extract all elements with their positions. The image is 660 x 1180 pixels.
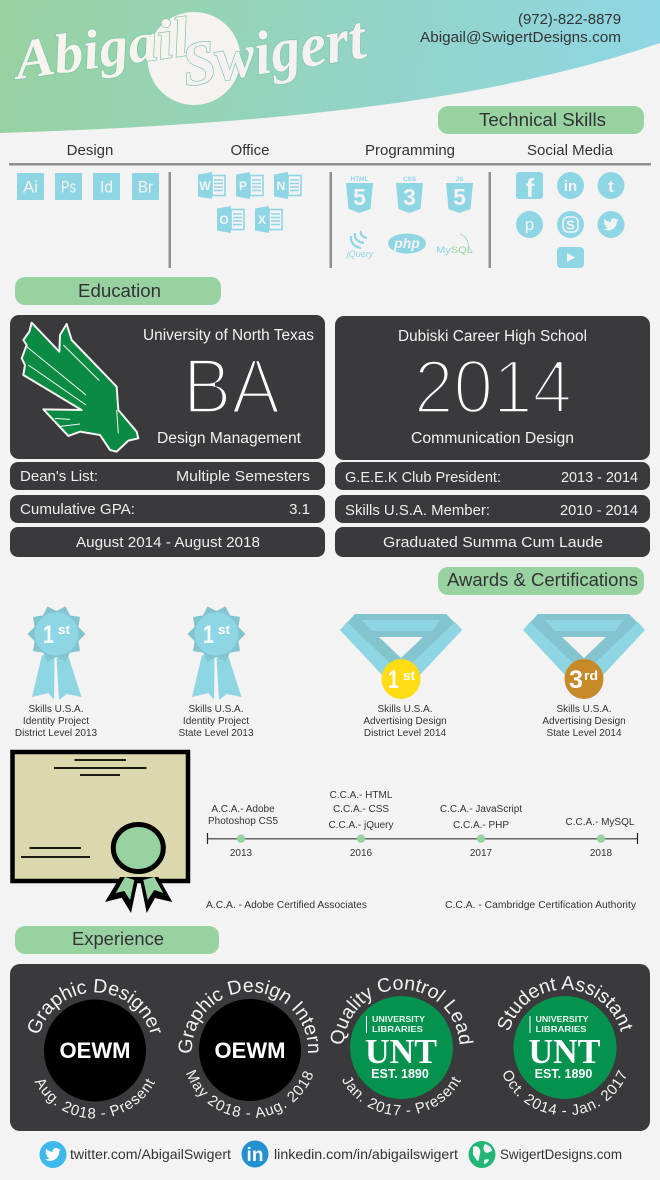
footer link: twitter: twitter.com/AbigailSwigert xyxy=(70,1146,231,1162)
programming icons: CSS xyxy=(403,176,417,183)
row: G.E.E.K Club: G.E.E.K Club President: xyxy=(345,469,501,486)
award medal 4: State Level 2014 xyxy=(546,728,622,739)
panel: Dubiski Career High School: 2014 xyxy=(414,345,572,430)
award medal 3: st xyxy=(403,669,416,683)
job: Quality Control Lead xyxy=(330,978,474,1116)
footer link: website xyxy=(468,1141,622,1168)
job: Graphic Design Intern: OEWM xyxy=(215,1038,285,1063)
award ribbon 2: Skills U.S.A. xyxy=(188,704,244,715)
heading: Awards & Certifications: Awards & Certifications xyxy=(447,570,638,590)
award medal 3: District Level 2014 xyxy=(364,728,447,739)
award ribbon 1: Skills U.S.A. xyxy=(28,704,84,715)
footer link: website: SwigertDesigns.com xyxy=(500,1146,622,1162)
skill column headings: Office xyxy=(231,142,269,159)
award ribbon 1 xyxy=(15,606,98,739)
office icons: X xyxy=(258,213,266,227)
social media icons: S xyxy=(566,218,575,232)
programming icons xyxy=(346,176,473,259)
job: Graphic Designer: Aug. 2018 - Present xyxy=(34,1078,155,1119)
programming icons: php xyxy=(393,235,420,251)
social media icons: t xyxy=(608,177,614,196)
certification timeline xyxy=(208,790,638,859)
panel: University of North Texas: Design Management xyxy=(157,430,302,447)
row: Summa Cum Laude xyxy=(335,527,650,557)
office icons xyxy=(198,172,301,233)
certification timeline: C.C.A.- CSS xyxy=(333,804,389,815)
award ribbon 2: Identity Project xyxy=(183,716,249,727)
logo: Abigail Swigert: Abigail xyxy=(8,6,194,92)
certification timeline: 2013 xyxy=(230,848,253,859)
design icons: Br xyxy=(138,178,153,196)
panel: Dubiski Career High School: Dubiski Career High School xyxy=(398,328,587,345)
row: G.E.E.K Club xyxy=(335,462,650,490)
skill column headings: Programming xyxy=(365,142,455,159)
panel: Dubiski Career High School: Communication Design xyxy=(411,430,574,447)
row: Dean's List: Multiple Semesters xyxy=(176,468,310,485)
header banner xyxy=(0,0,660,133)
job: Quality Control Lead: LIBRARIES xyxy=(372,1024,423,1034)
award ribbon 2 xyxy=(178,606,254,739)
award ribbon 2: st xyxy=(218,623,231,637)
job: Student Assistant: UNT xyxy=(528,1032,600,1071)
panel: University of North Texas: University of North Texas xyxy=(143,327,314,344)
office icons: P xyxy=(239,179,247,193)
programming icons: 3 xyxy=(403,184,416,210)
icon: UNT eagle xyxy=(22,323,138,452)
skill column headings: Design xyxy=(67,142,113,159)
footnote: C.C.A.: C.C.A. - Cambridge Certification Authority xyxy=(445,900,636,911)
design icons: Ps xyxy=(61,178,76,196)
programming icons: 5 xyxy=(353,184,366,210)
award ribbon 1: Identity Project xyxy=(23,716,89,727)
award medal 4: Advertising Design xyxy=(542,716,626,727)
footer link: twitter xyxy=(40,1141,231,1168)
award medal 4: rd xyxy=(584,669,598,683)
job: Student Assistant: UNIVERSITY xyxy=(536,1014,589,1024)
job: Graphic Designer: Graphic Designer xyxy=(28,978,161,1033)
job: Quality Control Lead: UNIVERSITY xyxy=(372,1014,425,1024)
footer link: linkedin: linkedin.com/in/abigailswigert xyxy=(274,1146,458,1162)
row: Skills U.S.A. xyxy=(335,495,650,523)
office icons: N xyxy=(277,179,285,193)
job: Quality Control Lead: UNT xyxy=(365,1032,437,1071)
design icons: Ai xyxy=(23,178,38,196)
heading: Education xyxy=(15,277,221,305)
skill column headings xyxy=(67,142,614,159)
logo: Abigail Swigert xyxy=(8,4,372,105)
certification timeline: Photoshop CS5 xyxy=(208,816,278,827)
row: Skills U.S.A.: 2010 - 2014 xyxy=(560,502,638,519)
skill column headings: Social Media xyxy=(527,142,614,159)
job: Student Assistant: LIBRARIES xyxy=(536,1024,587,1034)
programming icons: JS xyxy=(456,176,464,183)
icon: certificate xyxy=(12,752,188,913)
social media icons: p xyxy=(525,215,534,234)
social media icons: in xyxy=(564,178,577,195)
programming icons: jQuery xyxy=(346,249,374,259)
panel: experience xyxy=(10,964,650,1131)
job: Graphic Designer xyxy=(28,978,161,1119)
job: Quality Control Lead: EST. 1890 xyxy=(371,1067,429,1081)
contact details xyxy=(420,11,621,46)
job: Student Assistant: Oct. 2014 - Jan. 2017 xyxy=(504,1070,626,1115)
contact details: Abigail@SwigertDesigns.com xyxy=(420,29,621,46)
row: Cumulative GPA: 3.1 xyxy=(289,501,310,518)
footnote: A.C.A.: A.C.A. - Adobe Certified Associates xyxy=(206,900,367,911)
row: Dean's List xyxy=(10,462,325,490)
row: G.E.E.K Club: 2013 - 2014 xyxy=(561,469,638,486)
panel: University of North Texas: BA xyxy=(183,342,280,430)
certification timeline: 2018 xyxy=(590,848,613,859)
footer link: linkedin xyxy=(242,1140,458,1168)
job: Student Assistant: Student Assistant xyxy=(498,976,632,1032)
office icons: O xyxy=(219,213,229,227)
job: Graphic Designer: OEWM xyxy=(60,1038,130,1063)
row: Summa Cum Laude: Graduated Summa Cum Laude xyxy=(383,534,603,551)
award medal 4: Skills U.S.A. xyxy=(556,704,612,715)
certification timeline: C.C.A.- JavaScript xyxy=(440,804,522,815)
logo: Abigail Swigert: Swigert xyxy=(178,4,372,100)
certification timeline: C.C.A.- HTML xyxy=(330,790,393,801)
footer link: linkedin: in xyxy=(247,1145,263,1166)
row: dates xyxy=(10,527,325,557)
design icons: Id xyxy=(100,178,113,196)
row: dates: August 2014 - August 2018 xyxy=(76,534,260,551)
programming icons: My SQL xyxy=(436,245,473,255)
job: Quality Control Lead: Jan. 2017 - Present xyxy=(342,1076,461,1116)
contact details: (972)-822-8879 xyxy=(518,11,621,28)
award medal 3 xyxy=(340,614,462,739)
job: Graphic Design Intern: Graphic Design Intern xyxy=(178,980,318,1053)
heading: Technical Skills xyxy=(438,106,644,134)
award medal 3: Advertising Design xyxy=(363,716,447,727)
social media icons: f xyxy=(526,173,535,203)
job: Graphic Design Intern xyxy=(178,980,318,1118)
design icons xyxy=(17,173,159,200)
row: Dean's List: Dean's List: xyxy=(20,468,98,485)
certification timeline: C.C.A.- jQuery xyxy=(328,820,394,831)
award ribbon 2: 1 xyxy=(203,621,214,649)
row: Cumulative GPA xyxy=(10,495,325,523)
job: Graphic Design Intern: May 2018 - Aug. 2018 xyxy=(186,1070,313,1118)
row: Cumulative GPA: Cumulative GPA: xyxy=(20,501,135,518)
award medal 4 xyxy=(523,614,645,739)
award medal 4: 3 xyxy=(569,666,583,694)
certification timeline: C.C.A.- MySQL xyxy=(566,817,635,828)
heading: Experience: Experience xyxy=(72,929,164,949)
award medal 3: Skills U.S.A. xyxy=(377,704,433,715)
award medal 3: 1 xyxy=(388,666,399,694)
award ribbon 1: st xyxy=(58,623,71,637)
award ribbon 1: District Level 2013 xyxy=(15,728,98,739)
heading: Education: Education xyxy=(78,280,161,301)
award ribbon 1: 1 xyxy=(43,621,54,649)
certification timeline: 2016 xyxy=(350,848,373,859)
heading: Technical Skills: Technical Skills xyxy=(479,109,606,130)
row: Skills U.S.A.: Skills U.S.A. Member: xyxy=(345,502,490,519)
certification timeline: C.C.A.- PHP xyxy=(453,820,509,831)
heading: Awards & Certifications xyxy=(438,567,644,595)
job: Quality Control Lead: Quality Control Lead xyxy=(330,978,474,1044)
programming icons: HTML xyxy=(350,176,369,183)
job: Student Assistant: EST. 1890 xyxy=(535,1067,592,1081)
social media icons xyxy=(516,172,624,268)
award ribbon 2: State Level 2013 xyxy=(178,728,254,739)
panel: University of North Texas xyxy=(10,315,325,459)
panel: Dubiski Career High School xyxy=(335,316,650,460)
office icons: W xyxy=(199,179,211,193)
certification timeline: 2017 xyxy=(470,848,493,859)
job: Student Assistant xyxy=(498,976,632,1115)
programming icons: 5 xyxy=(453,184,466,210)
heading: Experience xyxy=(15,926,219,954)
certification timeline: A.C.A.- Adobe xyxy=(211,804,275,815)
